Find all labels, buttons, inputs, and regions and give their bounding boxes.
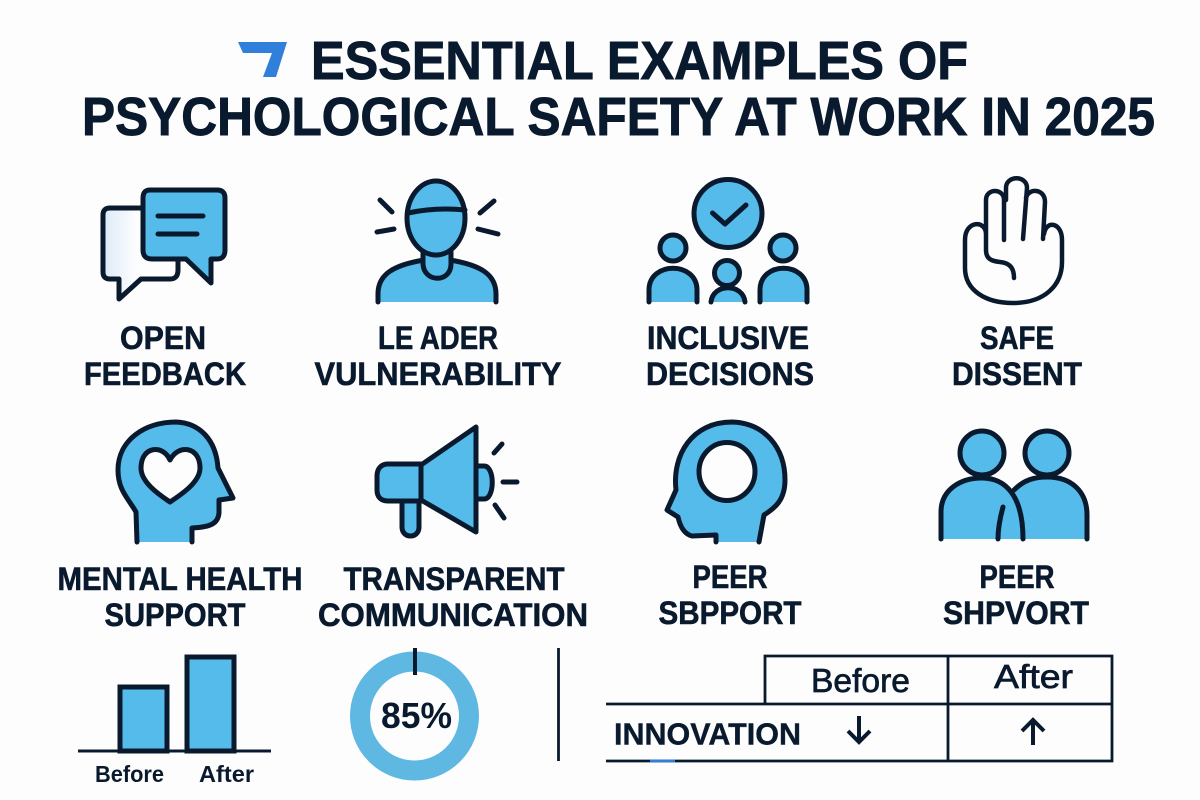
panel: open feedback: FEEDBACK — [84, 356, 246, 392]
icon: group with check circle — [649, 180, 807, 302]
arrow: up — [1022, 720, 1044, 745]
bar: before — [120, 687, 167, 751]
comparison table — [606, 656, 1112, 761]
panel: safe dissent — [952, 178, 1082, 392]
label: peer support two: PEER — [980, 559, 1054, 595]
column header: after: After — [994, 658, 1073, 695]
panel: leader vulnerability — [314, 181, 562, 392]
icon: megaphone — [377, 427, 517, 536]
column header: before: Before — [811, 662, 910, 699]
label: open feedback: OPEN — [120, 320, 206, 356]
panel: inclusive decisions: DECISIONS — [646, 356, 814, 392]
arrow: down — [848, 716, 870, 742]
icon: speech bubbles — [103, 190, 225, 299]
label: mental health support: MENTAL HEALTH — [58, 561, 302, 597]
panel: transparent communication: COMMUNICATION — [318, 597, 588, 633]
panel: mental health support — [58, 422, 302, 633]
panel: mental health support: SUPPORT — [104, 597, 246, 633]
icon: two people — [941, 431, 1087, 539]
icon: head with heart — [118, 422, 233, 542]
bar chart — [78, 657, 271, 787]
panel: peer support two — [941, 431, 1089, 631]
bar: after — [187, 657, 234, 751]
row label: innovation: INNOVATION — [614, 716, 801, 752]
panel: safe dissent: DISSENT — [952, 356, 1082, 392]
panel: peer support one: SBPPORT — [658, 595, 802, 631]
vertical divider — [557, 648, 560, 761]
panel: leader vulnerability: VULNERABILITY — [314, 356, 562, 392]
title numeral 7 — [238, 42, 287, 77]
icon: raised hand — [965, 178, 1062, 303]
label: transparent communication: TRANSPARENT — [344, 561, 565, 597]
panel: peer support two: SHPVORT — [943, 595, 1089, 631]
title line 1: ESSENTIAL EXAMPLES OF — [311, 31, 968, 91]
chart baseline — [78, 750, 271, 752]
label: peer support one: PEER — [692, 559, 768, 595]
panel: inclusive decisions — [646, 180, 814, 392]
label: inclusive decisions: INCLUSIVE — [647, 320, 809, 356]
title — [82, 31, 1155, 147]
panel: open feedback — [84, 190, 246, 392]
donut tick — [413, 648, 417, 675]
bar label: before: Before — [95, 761, 164, 787]
icon: leader with emphasis rays — [377, 181, 498, 302]
donut value: 85% — [381, 695, 452, 736]
panel: peer support one — [658, 422, 802, 631]
donut chart 85% — [360, 648, 469, 770]
bar label: after: After — [199, 761, 254, 787]
table grid — [606, 656, 1112, 761]
panel: transparent communication — [318, 427, 588, 633]
label: leader vulnerability: LE ADER — [378, 320, 498, 356]
label: safe dissent: SAFE — [980, 320, 1054, 356]
donut ring — [360, 662, 469, 770]
blue accent on bottom rule — [650, 760, 675, 762]
icon: head with circle — [667, 422, 785, 542]
